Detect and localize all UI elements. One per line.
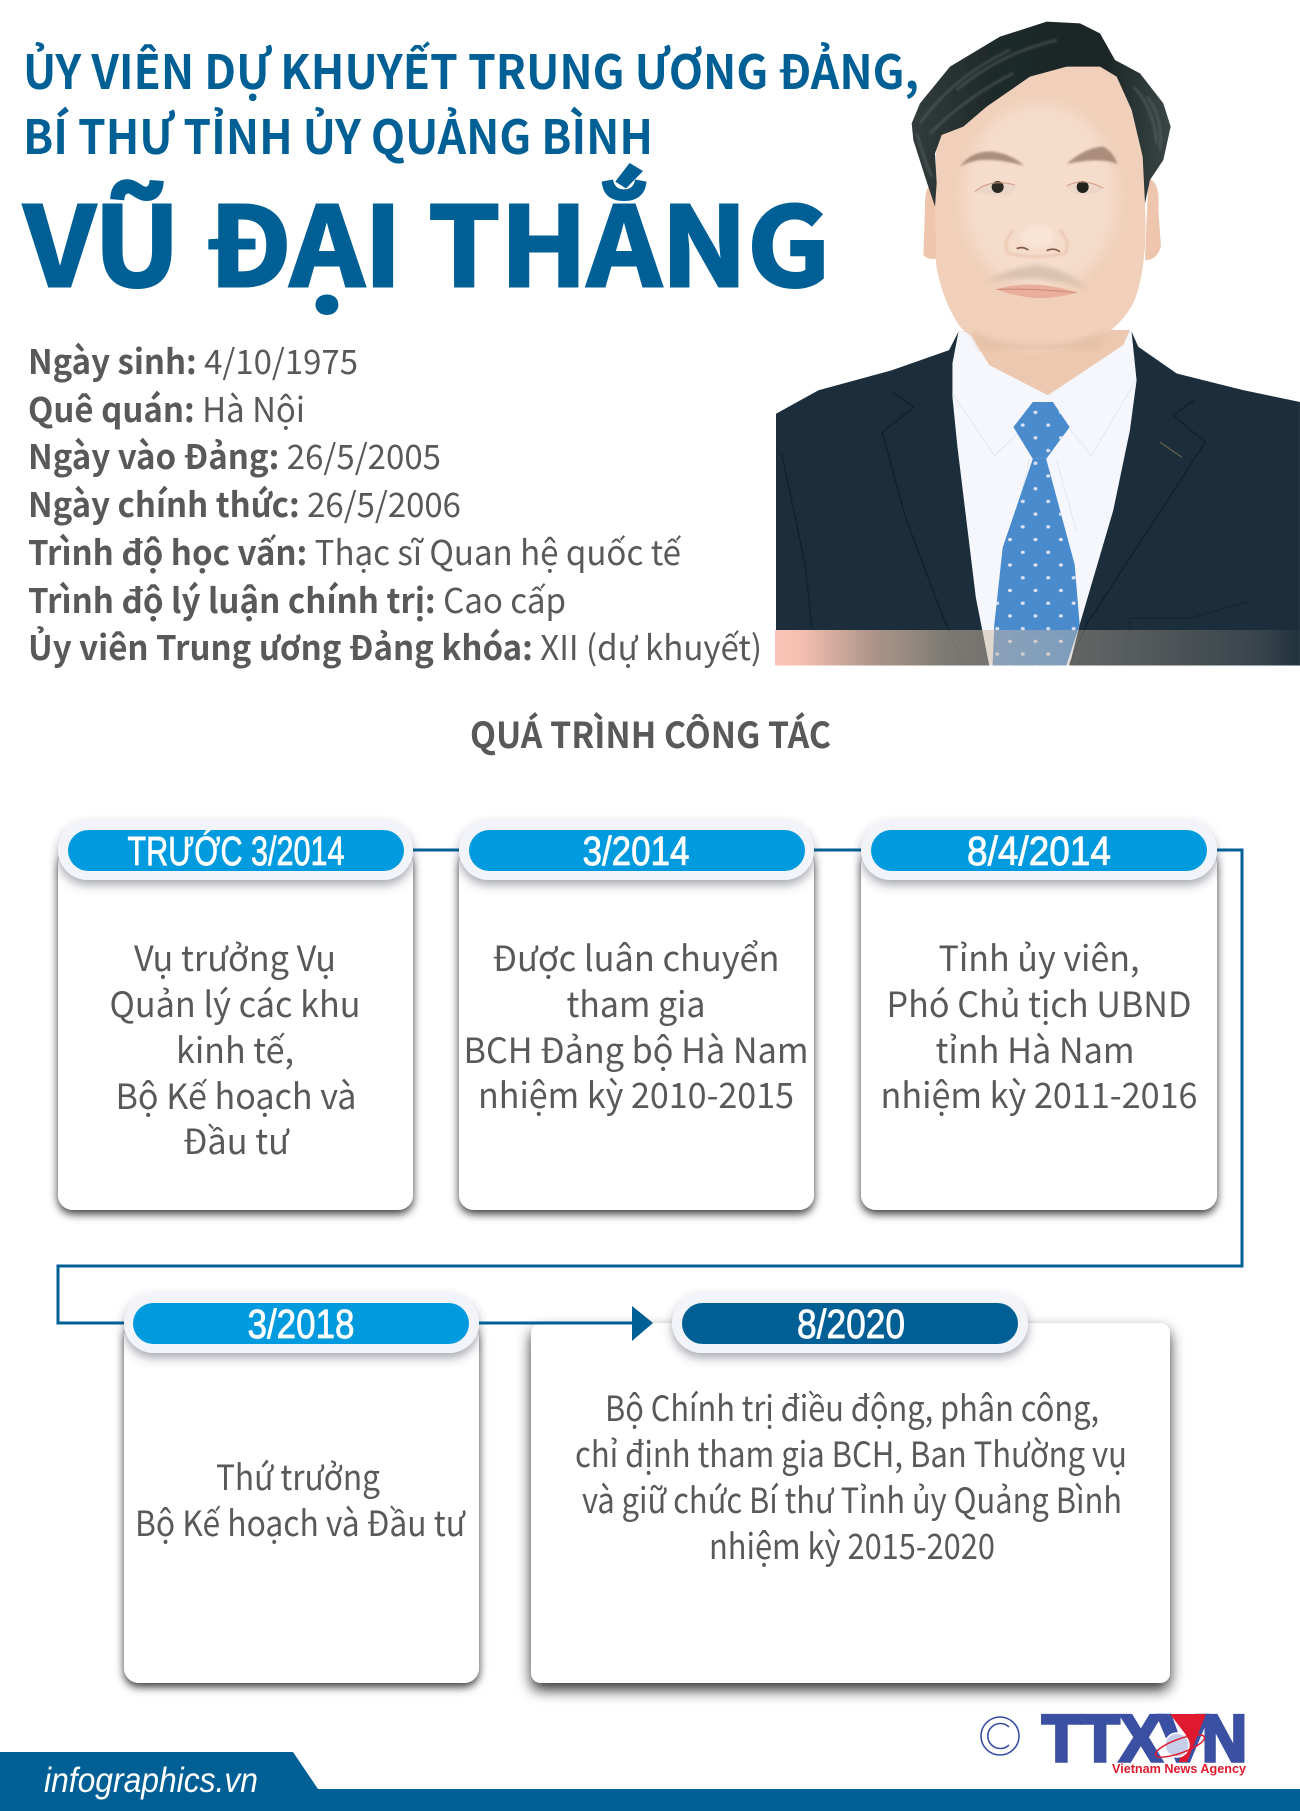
- bottom band: [775, 630, 1300, 666]
- home town: Quê quán: Hà Nội: [28, 383, 305, 432]
- body and suit: [776, 330, 1300, 665]
- orbit: [1153, 1731, 1207, 1761]
- blue letters: N: [1202, 1701, 1247, 1775]
- date pill: [672, 1293, 1028, 1353]
- shirt: [952, 332, 1137, 665]
- card text: Vụ trưởng Vụ: [134, 931, 336, 982]
- card text: Phó Chủ tịch UBND: [886, 977, 1192, 1028]
- card text: kinh tế,: [176, 1023, 294, 1074]
- nose shade: [1006, 230, 1067, 257]
- card text: BCH Đảng bộ Hà Nam: [464, 1023, 808, 1074]
- name: VŨ ĐẠI THẮNG: [23, 161, 830, 318]
- card body: [124, 1323, 479, 1683]
- card 4: [124, 1293, 479, 1683]
- tie knot: [1013, 402, 1070, 459]
- hair strands: [917, 40, 1161, 177]
- nostrils: [1017, 248, 1060, 252]
- official date: Ngày chính thức: 26/5/2006: [28, 478, 461, 527]
- card body: [861, 850, 1217, 1210]
- card text: Bộ Kế hoạch và: [116, 1069, 356, 1120]
- card text: Thứ trưởng: [216, 1450, 380, 1501]
- party date: Ngày vào Đảng: 26/5/2005: [28, 430, 441, 479]
- tie dots: [993, 402, 1080, 665]
- buttonhole: [1160, 442, 1182, 457]
- face: [935, 50, 1146, 353]
- head: [912, 22, 1171, 353]
- card body: [531, 1323, 1170, 1683]
- left eyebrow: [960, 152, 1024, 167]
- date pill: 3/2014: [582, 828, 690, 874]
- card text: nhiệm kỳ 2011-2016: [880, 1068, 1198, 1119]
- right eyebrow: [1067, 147, 1117, 164]
- lips: [997, 285, 1077, 298]
- date pill: [459, 820, 814, 880]
- date pill: 8/4/2014: [967, 828, 1111, 874]
- title line 1: ỦY VIÊN DỰ KHUYẾT TRUNG ƯƠNG ĐẢNG,: [23, 34, 919, 103]
- card text: tỉnh Hà Nam: [936, 1023, 1134, 1074]
- card text: và giữ chức Bí thư Tỉnh ủy Quảng Bình: [582, 1473, 1122, 1524]
- card text: Bộ Chính trị điều động, phân công,: [605, 1381, 1099, 1432]
- card text: nhiệm kỳ 2015-2020: [709, 1519, 995, 1570]
- card 1: [58, 820, 413, 1210]
- card text: nhiệm kỳ 2010-2015: [478, 1068, 794, 1119]
- date pill: [124, 1293, 479, 1353]
- political theory: Trình độ lý luận chính trị: Cao cấp: [28, 574, 566, 623]
- pocket: [1130, 601, 1250, 638]
- face highlight: [963, 103, 1117, 290]
- right ear: [1145, 178, 1161, 260]
- connector line: [58, 850, 1242, 1323]
- suit jacket: [776, 332, 1300, 665]
- copyright symbol: [981, 1717, 1019, 1755]
- agency name: Vietnam News Agency: [1112, 1761, 1247, 1776]
- footer band: [0, 1752, 1300, 1811]
- date pill: TRƯỚC 3/2014: [128, 828, 344, 874]
- lapel lines: [782, 392, 1205, 665]
- blue letters: TTX: [1042, 1701, 1162, 1775]
- card text: Tỉnh ủy viên,: [938, 931, 1140, 982]
- card text: [575, 1381, 1127, 1570]
- mustache: [987, 265, 1087, 288]
- TTXVN logo: [1042, 1701, 1247, 1776]
- title line 2: BÍ THƯ TỈNH ỦY QUẢNG BÌNH: [23, 99, 653, 168]
- card body: [58, 850, 413, 1210]
- card text: Quản lý các khu: [110, 977, 360, 1028]
- left eye: [975, 181, 1015, 195]
- card body: [459, 850, 814, 1210]
- section heading: QUÁ TRÌNH CÔNG TÁC: [470, 707, 831, 759]
- card text: [110, 931, 360, 1165]
- date pill: [58, 820, 413, 880]
- card text: tham gia: [566, 977, 706, 1028]
- personal details: [28, 335, 762, 670]
- card 3: [861, 820, 1217, 1210]
- left ear: [923, 185, 937, 259]
- card 5: [479, 1293, 1170, 1683]
- right eye: [1067, 181, 1103, 194]
- date pill: 8/2020: [797, 1301, 905, 1347]
- card text: Đầu tư: [183, 1114, 290, 1165]
- hair: [912, 22, 1171, 207]
- education: Trình độ học vấn: Thạc sĩ Quan hệ quốc tế: [28, 526, 681, 575]
- card text: [135, 1450, 466, 1547]
- blue letters: [1042, 1701, 1247, 1775]
- nose highlight: [1021, 225, 1054, 248]
- red V stroke: [1170, 1714, 1206, 1762]
- chin shade: [970, 330, 1107, 350]
- date pill: 3/2018: [248, 1301, 354, 1347]
- globe: [1165, 1733, 1189, 1757]
- date pill: [861, 820, 1217, 880]
- site name: infographics.vn: [44, 1761, 258, 1800]
- title: [23, 34, 919, 318]
- blue letters: V: [1158, 1701, 1208, 1775]
- card text: Bộ Kế hoạch và Đầu tư: [135, 1496, 466, 1547]
- card 2: [459, 820, 814, 1210]
- central committee: Ủy viên Trung ương Đảng khóa: XII (dự khuyết): [28, 621, 762, 670]
- tie blade: [993, 459, 1080, 665]
- card text: [880, 931, 1198, 1119]
- arrow: [479, 1306, 653, 1341]
- collar lines: [952, 380, 1136, 531]
- birth date: Ngày sinh: 4/10/1975: [28, 335, 358, 384]
- portrait photo: [775, 22, 1300, 665]
- card text: [464, 931, 808, 1119]
- card text: chỉ định tham gia BCH, Ban Thường vụ: [575, 1427, 1127, 1478]
- neck: [968, 330, 1130, 395]
- card text: Được luân chuyển: [492, 931, 780, 982]
